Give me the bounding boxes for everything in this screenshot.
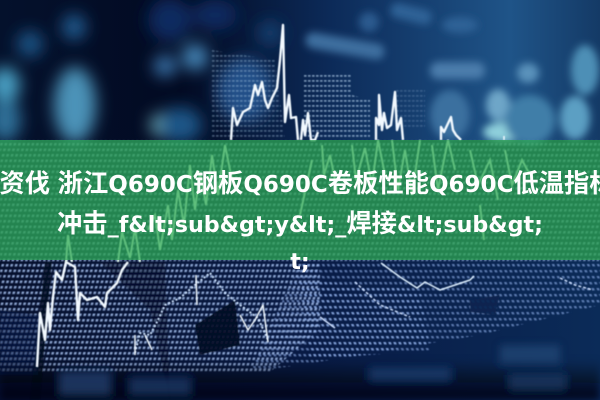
blurred foreground xyxy=(0,345,600,400)
title text xyxy=(0,164,600,275)
title text: 冲击_f&lt;sub&gt;y&lt;_焊接&lt;sub&gt; xyxy=(57,204,543,240)
title text: 资伐 浙江Q690C钢板Q690C卷板性能Q690C低温指标 xyxy=(0,164,600,200)
chart lines xyxy=(37,25,593,367)
chart lines seen through the band xyxy=(66,140,530,262)
green title band xyxy=(0,140,600,260)
bokeh blobs top xyxy=(0,0,282,143)
title text: t; xyxy=(290,249,310,275)
